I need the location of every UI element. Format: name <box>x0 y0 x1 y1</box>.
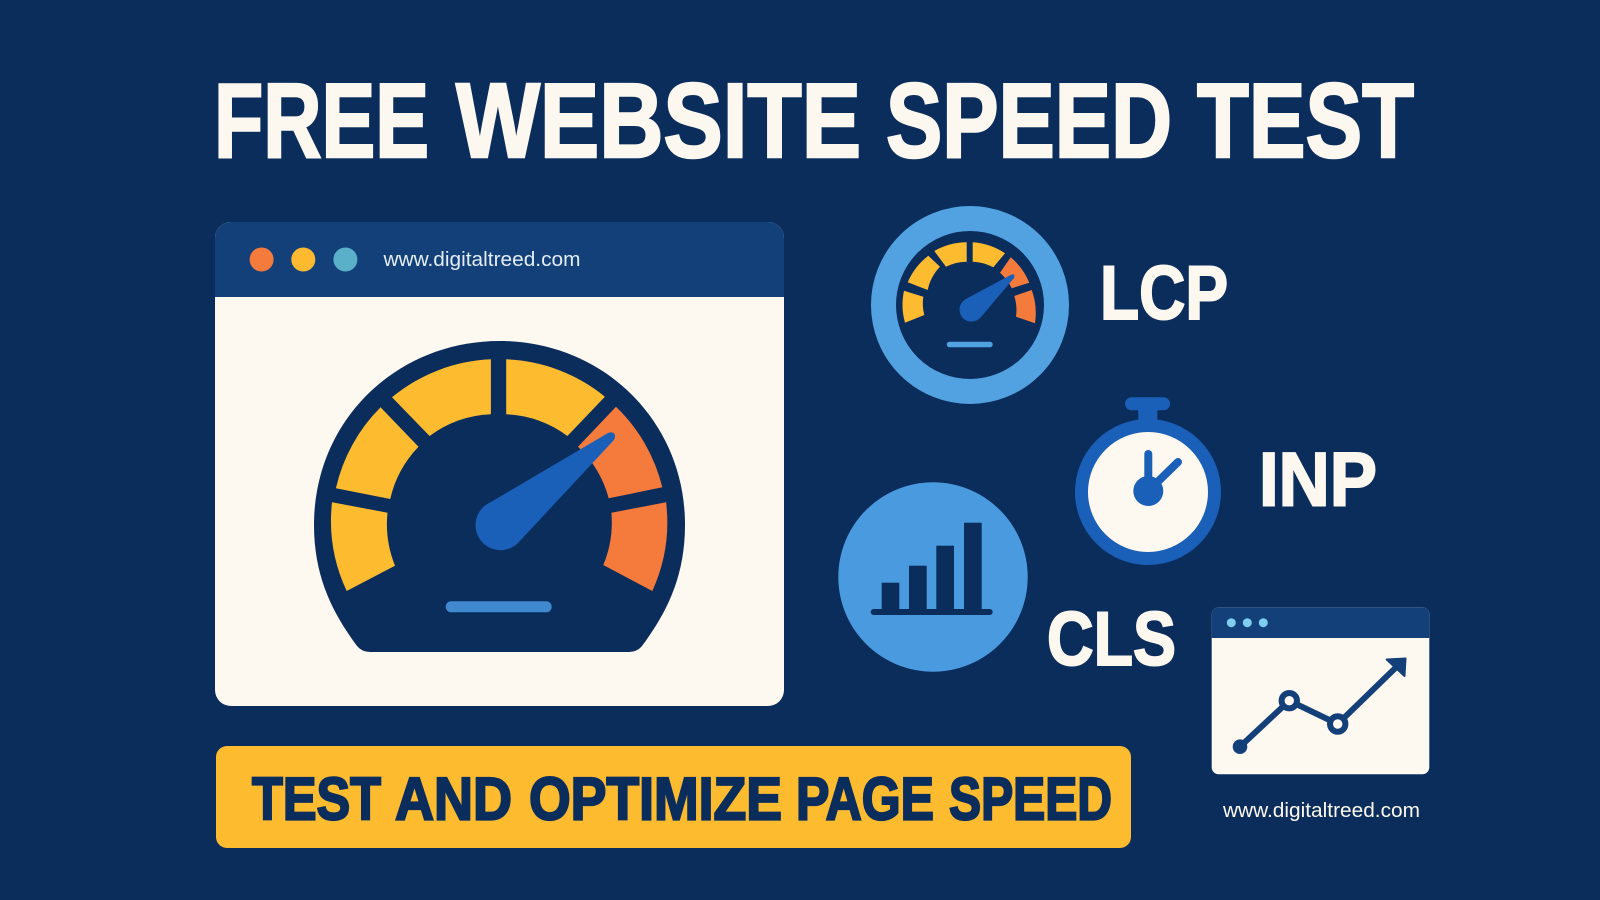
title: TEST <box>1197 62 1414 180</box>
title <box>214 62 1414 180</box>
browser url: www.digitaltreed.com <box>382 248 580 271</box>
banner: AND <box>395 766 512 832</box>
title: WEBSITE <box>456 62 861 180</box>
banner: TEST <box>252 766 381 832</box>
title: SPEED <box>886 62 1172 180</box>
window dot: teal <box>333 248 357 272</box>
gauge needle <box>476 432 615 550</box>
label: LCP: LCP <box>1100 251 1228 336</box>
icon: stopwatch <box>1082 397 1214 558</box>
gauge body <box>314 341 685 652</box>
window dot: yellow <box>291 248 315 272</box>
window dot: orange <box>250 248 274 272</box>
panel: small browser with trend line <box>1212 607 1429 774</box>
gauge segments: orange <box>578 407 667 591</box>
caption url: www.digitaltreed.com <box>1222 799 1420 822</box>
banner: PAGE <box>796 766 934 832</box>
browser body <box>215 222 784 706</box>
icon: LCP gauge <box>884 218 1056 392</box>
gauge segments: yellow <box>331 359 605 591</box>
label: CLS: CLS <box>1047 597 1176 682</box>
label: INP: INP <box>1259 438 1377 522</box>
banner: SPEED <box>949 766 1112 832</box>
speedometer <box>314 341 685 652</box>
title: FREE <box>214 62 429 180</box>
icon: bar chart circle <box>838 482 1028 672</box>
banner: OPTIMIZE <box>529 766 782 832</box>
banner <box>216 746 1131 848</box>
browser header bar <box>215 222 784 297</box>
gauge readout bar <box>446 601 552 612</box>
panel: browser window with speedometer <box>215 222 784 706</box>
